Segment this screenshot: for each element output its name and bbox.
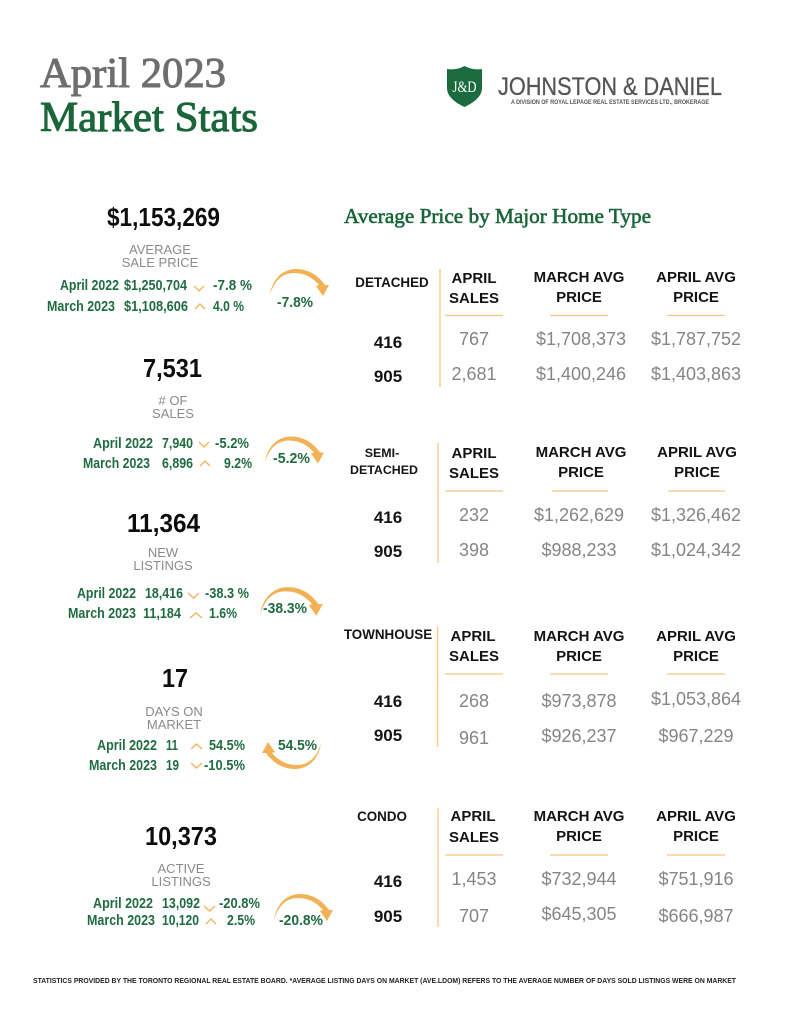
panel: new listings: 11,184 xyxy=(143,605,182,622)
panel: number of sales: SALES xyxy=(152,406,194,421)
panel: number of sales: # OF xyxy=(159,393,188,408)
table: condo: PRICE xyxy=(556,828,602,845)
table: townhouse: TOWNHOUSE xyxy=(344,627,432,642)
table: townhouse: $967,229 xyxy=(658,726,734,746)
panel: average sale price: March 2023 xyxy=(47,298,115,315)
panel: number of sales: 7,940 xyxy=(162,435,193,452)
table: condo: 1,453 xyxy=(451,869,497,889)
table: detached: 905 xyxy=(374,367,402,386)
table: townhouse: 268 xyxy=(459,691,489,711)
panel: days on market: 19 xyxy=(166,757,179,774)
logo: Johnston & Daniel: A DIVISION OF ROYAL LEPAGE REAL ESTATE SERVICES LTD., BROKERAGE xyxy=(511,100,709,106)
panel: days on market: 54.5% xyxy=(278,737,317,754)
table: detached: PRICE xyxy=(556,289,602,306)
table: semi-detached: APRIL xyxy=(452,445,496,462)
table: detached: $1,400,246 xyxy=(536,364,626,384)
table: condo xyxy=(357,808,736,927)
panel: average sale price: AVERAGE xyxy=(129,242,191,257)
table: condo: 707 xyxy=(459,906,489,926)
table: townhouse: SALES xyxy=(449,648,499,665)
table: detached: PRICE xyxy=(673,289,719,306)
logo: Johnston & Daniel: JOHNSTON & DANIEL xyxy=(498,73,722,101)
panel: days on market: March 2023 xyxy=(89,757,157,774)
panel: new listings: 11,364 xyxy=(127,508,201,538)
table: condo: APRIL xyxy=(450,808,496,825)
panel: number of sales: -5.2% xyxy=(215,435,249,452)
table: townhouse: PRICE xyxy=(556,648,602,665)
table: semi-detached: 232 xyxy=(459,505,489,525)
table: detached xyxy=(355,269,741,387)
table: detached: $1,708,373 xyxy=(536,329,626,349)
panel: average sale price: $1,108,606 xyxy=(124,298,188,315)
table: semi-detached: 416 xyxy=(374,508,402,527)
table: townhouse: $1,053,864 xyxy=(651,689,741,709)
panel: number of sales: April 2022 xyxy=(93,435,153,452)
table: detached: $1,787,752 xyxy=(651,329,741,349)
table: condo: PRICE xyxy=(673,828,719,845)
table: condo: CONDO xyxy=(357,809,407,824)
title xyxy=(40,51,258,141)
table: townhouse: 905 xyxy=(374,726,402,745)
table: semi-detached xyxy=(350,443,741,563)
table: condo: $645,305 xyxy=(541,904,617,924)
arrow: up 54.5% xyxy=(262,742,321,769)
table: semi-detached: MARCH AVG xyxy=(536,444,626,461)
table: townhouse: PRICE xyxy=(673,648,719,665)
panel: number of sales: 6,896 xyxy=(162,455,193,472)
table: semi-detached: PRICE xyxy=(674,464,720,481)
table: semi-detached: $988,233 xyxy=(541,540,617,560)
table: semi-detached: SEMI- xyxy=(365,446,399,460)
table: condo: 905 xyxy=(374,907,402,926)
icon: shield: J&D xyxy=(452,79,476,96)
panel: active listings: 13,092 xyxy=(162,895,200,912)
title: April 2023 xyxy=(40,51,226,97)
panel: new listings: 18,416 xyxy=(145,585,183,602)
table: condo: $666,987 xyxy=(658,906,734,926)
table: condo: SALES xyxy=(449,829,499,846)
panel: new listings: 1.6% xyxy=(209,605,237,622)
panel: active listings: March 2023 xyxy=(87,912,155,929)
panel: average sale price: $1,250,704 xyxy=(124,277,188,294)
logo: Johnston & Daniel xyxy=(447,66,722,107)
panel: active listings xyxy=(87,821,333,929)
panel: average sale price: -7.8 % xyxy=(213,277,252,294)
panel: days on market: April 2022 xyxy=(97,737,157,754)
panel: active listings: -20.8% xyxy=(279,912,323,929)
panel: new listings: -38.3 % xyxy=(205,585,249,602)
table: semi-detached: $1,326,462 xyxy=(651,505,741,525)
table: condo: APRIL AVG xyxy=(656,808,736,825)
panel: average sale price: $1,153,269 xyxy=(107,202,220,232)
table: semi-detached: DETACHED xyxy=(350,463,418,477)
table: semi-detached: SALES xyxy=(449,465,499,482)
arrow: down -38.3% xyxy=(260,587,323,616)
title: Market Stats xyxy=(40,95,258,141)
table: condo: $732,944 xyxy=(541,869,617,889)
panel: days on market: -10.5% xyxy=(204,757,245,774)
panel: average sale price: SALE PRICE xyxy=(122,255,199,270)
panel: active listings: 10,373 xyxy=(145,821,217,851)
table: semi-detached: 398 xyxy=(459,540,489,560)
panel: days on market: DAYS ON xyxy=(145,704,203,719)
table: townhouse: $926,237 xyxy=(541,726,617,746)
panel: active listings: LISTINGS xyxy=(151,874,211,889)
panel: days on market: 11 xyxy=(166,737,178,754)
panel: active listings: April 2022 xyxy=(93,895,153,912)
table: condo: 416 xyxy=(374,872,402,891)
panel: active listings: ACTIVE xyxy=(158,861,205,876)
table: townhouse: APRIL AVG xyxy=(656,628,736,645)
panel: number of sales: 7,531 xyxy=(143,353,202,383)
table: townhouse: $973,878 xyxy=(541,691,617,711)
panel: active listings: 2.5% xyxy=(227,912,255,929)
table: semi-detached: 905 xyxy=(374,542,402,561)
panel: active listings: -20.8% xyxy=(219,895,260,912)
table: semi-detached: PRICE xyxy=(558,464,604,481)
panel: new listings: -38.3% xyxy=(263,600,307,617)
table: detached: 416 xyxy=(374,333,402,352)
panel: average sale price: -7.8% xyxy=(277,294,313,311)
panel: new listings: LISTINGS xyxy=(133,558,193,573)
table: condo: MARCH AVG xyxy=(534,808,624,825)
panel: days on market: MARKET xyxy=(147,717,201,732)
footnote: STATISTICS PROVIDED BY THE TORONTO REGIONAL REAL ESTATE BOARD. *AVERAGE LISTING DAYS ON MARKET (AVE.LDOM) REFERS TO THE AVERAGE NUMBER OF DAYS SOLD LISTINGS WERE ON MARKET xyxy=(33,978,737,985)
arrow: down -20.8% xyxy=(274,894,333,921)
table: townhouse xyxy=(344,627,741,748)
icon: shield xyxy=(447,66,482,107)
heading: average price by major home type: Average Price by Major Home Type xyxy=(344,204,651,228)
panel: new listings xyxy=(68,508,323,622)
table: condo: $751,916 xyxy=(658,869,734,889)
panel: new listings: April 2022 xyxy=(77,585,136,602)
panel: days on market: 17 xyxy=(162,663,188,693)
table: semi-detached: $1,024,342 xyxy=(651,540,741,560)
arrow: down -7.8% xyxy=(270,269,329,296)
table: townhouse: 416 xyxy=(374,692,402,711)
table: semi-detached: APRIL AVG xyxy=(657,444,737,461)
table: detached: 767 xyxy=(459,329,489,349)
table: detached: 2,681 xyxy=(451,364,497,384)
panel: average sale price: April 2022 xyxy=(60,277,119,294)
table: detached: DETACHED xyxy=(355,275,429,290)
panel: number of sales xyxy=(83,353,324,472)
table: townhouse: 961 xyxy=(459,728,489,748)
table: townhouse: MARCH AVG xyxy=(534,628,624,645)
panel: days on market xyxy=(89,663,321,774)
panel: new listings: NEW xyxy=(148,545,179,560)
panel: days on market: 54.5% xyxy=(209,737,245,754)
table: detached: APRIL AVG xyxy=(656,269,736,286)
table: detached: MARCH AVG xyxy=(534,269,624,286)
panel: active listings: 10,120 xyxy=(162,912,199,929)
table: detached: $1,403,863 xyxy=(651,364,741,384)
arrow: down -5.2% xyxy=(265,436,324,464)
table: semi-detached: $1,262,629 xyxy=(534,505,624,525)
panel: average sale price xyxy=(47,202,329,315)
table: detached: APRIL xyxy=(452,270,496,287)
panel: number of sales: 9.2% xyxy=(224,455,252,472)
panel: new listings: March 2023 xyxy=(68,605,136,622)
panel: average sale price: 4.0 % xyxy=(213,298,244,315)
table: townhouse: APRIL xyxy=(450,628,496,645)
panel: number of sales: -5.2% xyxy=(273,450,310,467)
panel: number of sales: March 2023 xyxy=(83,455,150,472)
table: detached: SALES xyxy=(449,290,499,307)
